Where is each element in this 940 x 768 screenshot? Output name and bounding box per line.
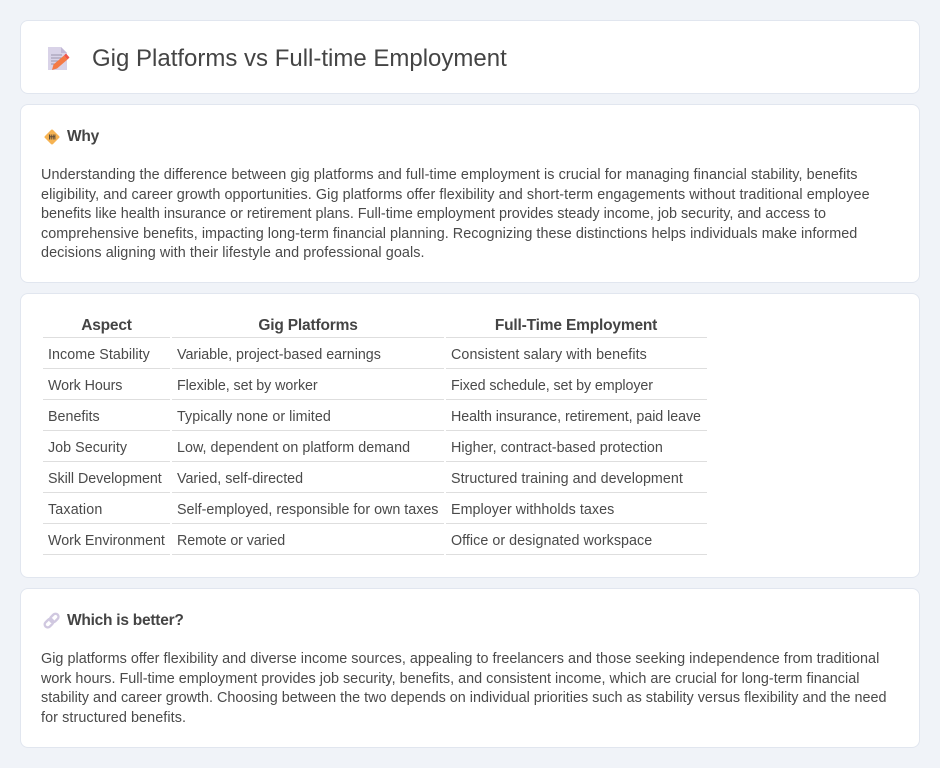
comparison table: Health insurance, retirement, paid leave bbox=[451, 409, 701, 425]
comparison table: Consistent salary with benefits bbox=[451, 347, 647, 363]
comparison table: Employer withholds taxes bbox=[451, 502, 614, 518]
comparison table: Income Stability bbox=[48, 347, 150, 363]
comparison table: Remote or varied bbox=[177, 533, 285, 549]
comparison table: Full-Time Employment bbox=[495, 317, 657, 334]
comparison table: Self-employed, responsible for own taxes bbox=[177, 502, 438, 518]
comparison table: Gig Platforms bbox=[258, 317, 358, 334]
comparison table: Work Hours bbox=[48, 378, 122, 394]
comparison table: Fixed schedule, set by employer bbox=[451, 378, 653, 394]
text block: which is better: work hours. Full-time employment provides job security, benefits, and consistent income, which are crucial for long-term financial bbox=[41, 671, 859, 687]
text block: which is better: stability and career growth. Choosing between the two depends on individual priorities such as stability versus flexibility and the need bbox=[41, 690, 887, 706]
text block: which is better bbox=[41, 651, 887, 726]
comparison table: Varied, self-directed bbox=[177, 471, 303, 487]
comparison table: Job Security bbox=[48, 440, 127, 456]
comparison table: Skill Development bbox=[48, 471, 162, 487]
comparison table: Higher, contract-based protection bbox=[451, 440, 663, 456]
comparison table: Typically none or limited bbox=[177, 409, 331, 425]
text block: why: eligibility, and career growth opportunities. Gig platforms offer flexibility and short-term engagements without traditional employee bbox=[41, 187, 870, 203]
comparison table: Low, dependent on platform demand bbox=[177, 440, 410, 456]
text block: why: Understanding the difference between gig platforms and full-time employment is crucial for managing financial stability, benefits bbox=[41, 167, 858, 183]
text block: which is better: for structured benefits. bbox=[41, 710, 186, 726]
title: Gig Platforms vs Full-time Employment bbox=[92, 45, 507, 72]
panel: which is better bbox=[20, 588, 920, 748]
comparison table: Benefits bbox=[48, 409, 100, 425]
text block: why: benefits like health insurance or retirement plans. Full-time employment provides steady income, job security, and access to bbox=[41, 206, 826, 222]
comparison table: Structured training and development bbox=[451, 471, 683, 487]
comparison table: Flexible, set by worker bbox=[177, 378, 318, 394]
text block: why: comprehensive benefits, impacting long-term financial planning. Recognizing these distinctions helps individuals make informed bbox=[41, 226, 857, 242]
comparison table: Aspect bbox=[81, 317, 132, 334]
text block: why bbox=[41, 167, 870, 261]
icon: chain link bbox=[44, 612, 60, 629]
icon: diamond sign bbox=[44, 130, 60, 144]
text block: which is better: Gig platforms offer flexibility and diverse income sources, appealing to freelancers and those seeking independence from traditional bbox=[41, 651, 879, 667]
comparison table: Taxation bbox=[48, 502, 102, 518]
panel: title header bbox=[20, 20, 920, 94]
panel: why bbox=[20, 104, 920, 283]
heading: which is better: Which is better? bbox=[67, 612, 184, 629]
comparison table: Variable, project-based earnings bbox=[177, 347, 381, 363]
comparison table: Work Environment bbox=[48, 533, 165, 549]
panel: comparison table bbox=[20, 293, 920, 578]
comparison table: Office or designated workspace bbox=[451, 533, 652, 549]
text block: why: decisions aligning with their lifestyle and professional goals. bbox=[41, 245, 425, 261]
icon: document with pencil bbox=[48, 47, 70, 70]
heading: why: Why bbox=[67, 128, 99, 145]
comparison table bbox=[43, 317, 707, 555]
